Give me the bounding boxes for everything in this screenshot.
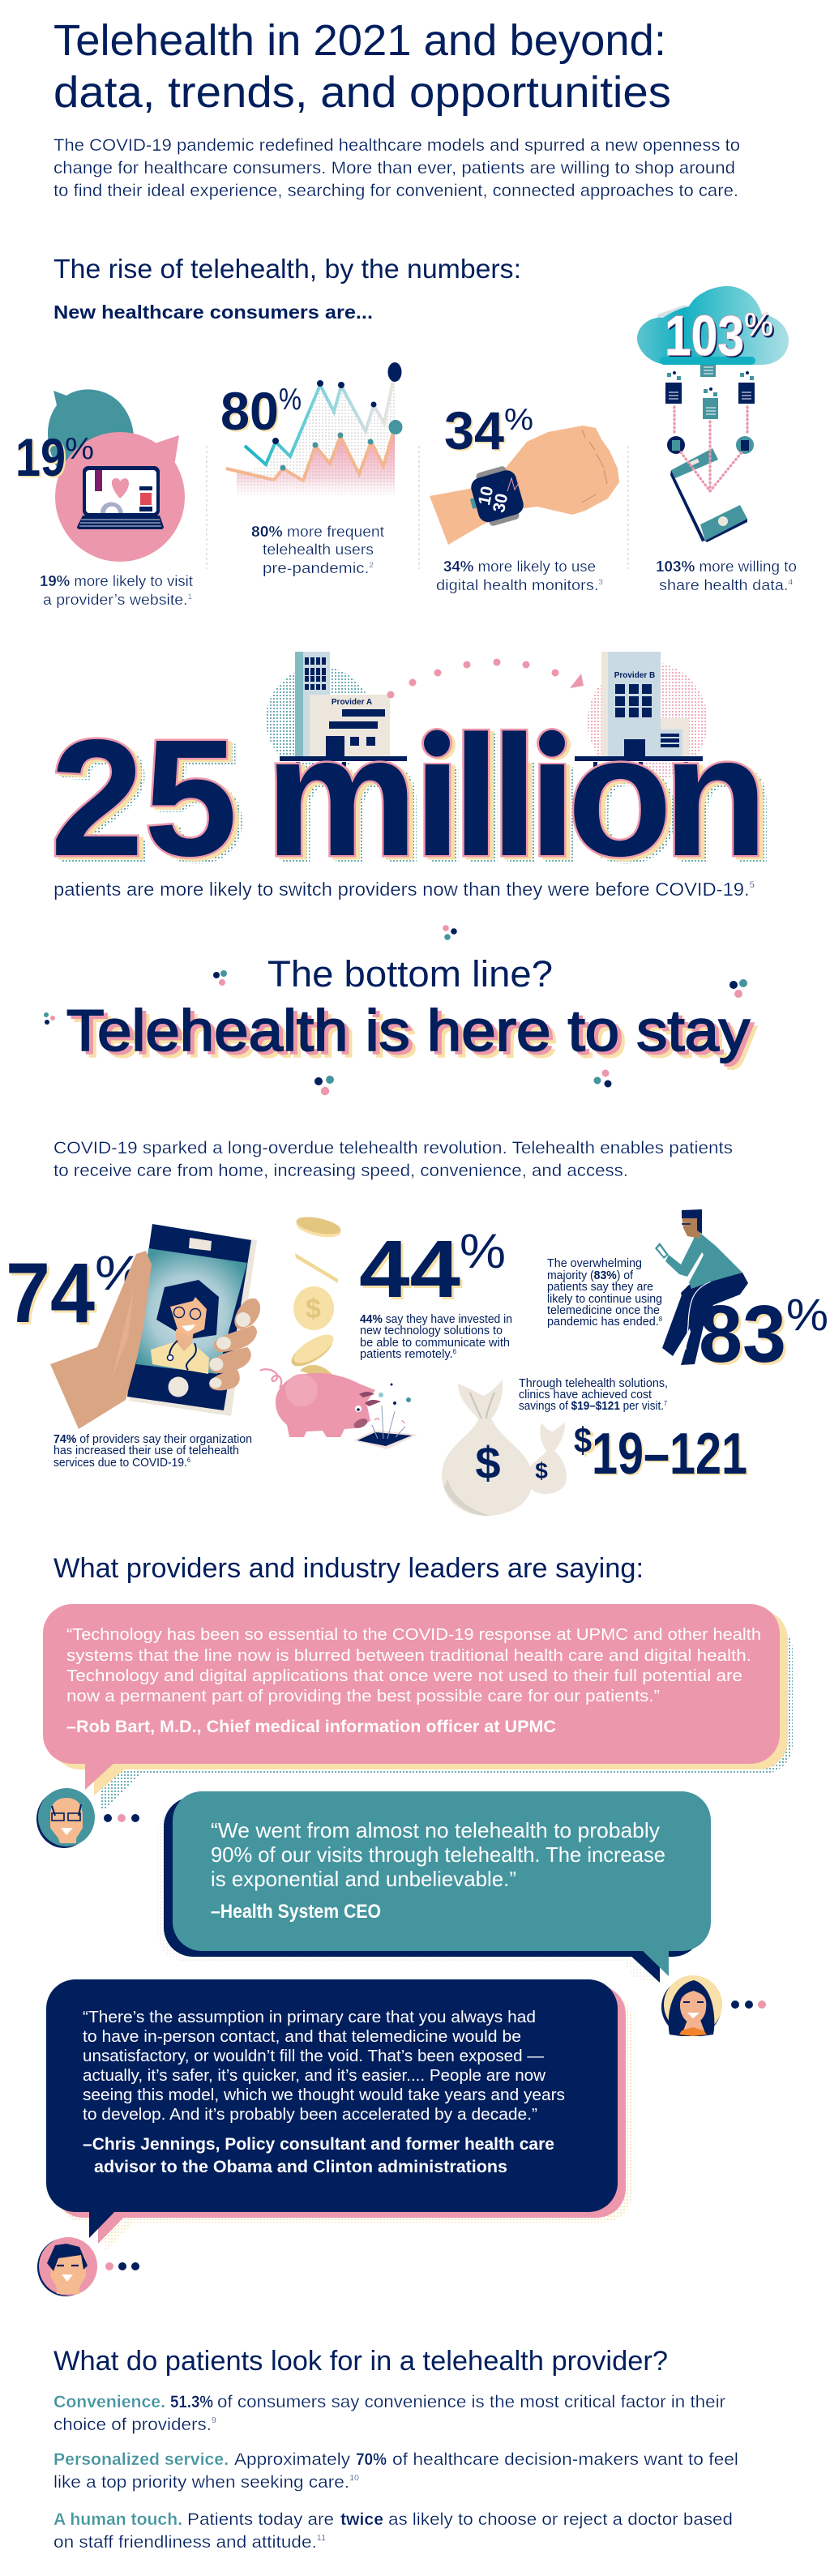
caption: 74%: services due to COVID-19.	[53, 1456, 198, 1470]
panel: navy quote bubble	[46, 1979, 632, 2252]
caption: 44%: 6	[453, 1348, 457, 1355]
caption: savings: 7	[664, 1400, 667, 1407]
panel: pink quote bubble	[43, 1604, 793, 1809]
stat: 103%: 103	[665, 304, 744, 367]
stat: 44%: 44	[359, 1224, 460, 1315]
text block: personalized service: 10	[349, 2474, 359, 2483]
text block: a human touch	[53, 2510, 733, 2552]
caption: 83%: majority (83%) of	[547, 1269, 634, 1282]
caption: 34%: 3	[598, 578, 603, 586]
quote attribution: advisor to the Obama and Clinton administrations	[94, 2158, 507, 2176]
caption: 34%: digital health monitors.	[436, 577, 582, 593]
panel: cost savings	[442, 1376, 749, 1516]
stat: 83%: 83	[699, 1289, 786, 1380]
caption: 74%: 74% of providers say their organization	[53, 1432, 252, 1446]
caption: patients switching: patients are more likely to switch providers now than they were before COVID-19.	[53, 879, 726, 900]
panel: 74 percent providers	[6, 1224, 260, 1470]
quote text: to develop. And it’s probably been accelerated by a decade.”	[83, 2105, 537, 2124]
text block: a human touch: twice	[340, 2510, 383, 2529]
panel: 19 percent website	[15, 389, 193, 608]
caption: 34%	[436, 558, 603, 593]
caption: 83%: telemedicine once the	[547, 1303, 660, 1317]
icon: cloud	[637, 286, 789, 365]
illustration: money bags	[442, 1380, 567, 1516]
illustration: piggy bank	[260, 1365, 381, 1437]
text block: convenience: Convenience.	[53, 2393, 165, 2411]
quote text	[83, 2008, 565, 2124]
stat: 44%: %	[460, 1224, 506, 1278]
text block: personalized service: 70%	[356, 2450, 387, 2469]
quote text: Technology and digital applications that once were not used to their full potential are	[66, 1667, 742, 1685]
confetti dots	[44, 925, 747, 1095]
quote text: seeing this model, which we thought would take years and years	[83, 2086, 565, 2104]
caption: savings: Through telehealth solutions,	[519, 1376, 668, 1390]
illustration: money bags: $	[475, 1437, 501, 1488]
caption: savings: savings of $19–$121 per visit.	[519, 1399, 669, 1413]
quote text: systems that the line now is blurred between traditional health care and digital health.	[66, 1647, 751, 1665]
avatar: health system CEO	[661, 1975, 722, 2036]
big number: 25 million: 25	[50, 705, 237, 891]
panel: 83 percent continue	[547, 1209, 828, 1382]
big number: 25 million: million	[272, 704, 775, 896]
stat: 80%: 80	[222, 383, 280, 443]
stat: 44%	[359, 1224, 506, 1317]
caption: 74%: 6	[187, 1457, 191, 1464]
icon: wrist with smartwatch: 30	[490, 492, 511, 514]
stat: 19%: 19	[15, 427, 66, 487]
quote attribution	[83, 2135, 554, 2176]
illustration: provider A building	[280, 652, 407, 780]
panel: 80 percent users	[220, 362, 402, 576]
stat: 34%: %	[504, 403, 533, 437]
caption: 19%: 1	[188, 593, 192, 601]
dotted connection lines	[674, 407, 747, 491]
stat: 83%: %	[786, 1289, 828, 1340]
icon: phone receiving data	[670, 448, 747, 542]
illustration: falling coins: $	[306, 1294, 321, 1324]
heading: the rise of telehealth: The rise of telehealth, by the numbers:	[53, 254, 521, 284]
title	[53, 16, 671, 117]
illustration: provider B building	[575, 652, 703, 777]
stat: 19%: %	[65, 432, 94, 466]
title: data, trends, and opportunities	[53, 68, 671, 117]
caption: 83%: The overwhelming	[547, 1256, 642, 1270]
title: Telehealth in 2021 and beyond:	[53, 16, 666, 65]
caption: savings	[519, 1376, 668, 1413]
text block: personalized service: Personalized service.	[53, 2450, 229, 2469]
caption: savings: clinics have achieved cost	[519, 1388, 652, 1401]
caption: 44%: 44% say they have invested in	[360, 1312, 512, 1326]
caption: 19%: a provider’s website.	[43, 592, 176, 608]
quote text: “There’s the assumption in primary care that you always had	[83, 2008, 536, 2026]
panel: 25 million patients	[50, 652, 775, 900]
panel: 34 percent monitors	[430, 400, 619, 593]
illustration: money bags: $	[535, 1458, 548, 1483]
caption: 83%: patients say they are	[547, 1280, 653, 1294]
caption: 80%: pre-pandemic.	[263, 560, 356, 576]
stat: $19-121: 19–121	[592, 1422, 747, 1487]
text block: convenience: of consumers say convenience is the most critical factor in their	[217, 2393, 725, 2411]
big number: 25 million: million	[265, 700, 768, 892]
caption: 74%: has increased their use of telehealth	[53, 1444, 239, 1457]
illustration: provider A building: Provider A	[332, 698, 372, 707]
stat: 80%: %	[279, 383, 302, 417]
text block: a human touch: as likely to choose or reject a doctor based	[388, 2510, 733, 2529]
text block: convenience: 51.3%	[170, 2393, 213, 2411]
caption: 74%	[53, 1432, 252, 1470]
heading: what do patients look for: What do patients look for in a telehealth provider?	[53, 2346, 668, 2377]
stat: 74%: 74	[6, 1246, 95, 1341]
line chart	[226, 362, 402, 499]
panel: 44 percent investment	[260, 1213, 512, 1449]
illustration: provider B building: Provider B	[614, 671, 655, 680]
stat: $19-121: 19–121	[593, 1423, 749, 1488]
paragraph: telehealth revolution	[53, 1139, 733, 1180]
stat: $19-121: $	[575, 1423, 595, 1462]
caption: 83%: 8	[659, 1316, 663, 1323]
typing dots 3	[105, 2262, 139, 2270]
headline: telehealth is here to stay: Telehealth is here to stay	[71, 1003, 755, 1067]
quote text: 90% of our visits through telehealth. The increase	[211, 1842, 665, 1867]
stat: 44%: 44	[362, 1226, 463, 1317]
text block: a human touch: 11	[317, 2534, 326, 2543]
big number: 25 million: 25	[58, 710, 245, 896]
stat: 103%: 103	[666, 306, 746, 369]
typing dots 2	[731, 2000, 766, 2009]
quote text	[211, 1818, 665, 1891]
text block: a human touch: on staff friendliness and attitude.	[53, 2533, 298, 2552]
stat: 83%: 83	[701, 1291, 789, 1382]
stat: 103%: %	[746, 309, 775, 344]
illustration: dots behind buildings	[266, 661, 708, 781]
icon: wrist with smartwatch	[430, 426, 619, 545]
big number: 25 million: 25	[54, 708, 242, 893]
caption: 83%	[547, 1256, 663, 1329]
caption: 19%: 19% more likely to visit	[40, 573, 193, 589]
quote text: to have in-person contact, and that telemedicine would be	[83, 2027, 521, 2046]
stat: 34%	[444, 400, 533, 462]
text block: a human touch: Patients today are	[187, 2510, 334, 2529]
illustration: tablet with sparks	[353, 1383, 417, 1449]
caption: 103%: 103% more willing to	[656, 558, 797, 575]
avatar: Rob Bart	[36, 1788, 95, 1848]
caption: 83%: pandemic has ended.	[547, 1315, 663, 1329]
stat: 80%: 80	[220, 381, 279, 441]
intro paragraph: change for healthcare consumers. More than ever, patients are willing to shop around	[53, 159, 735, 178]
caption: 44%: patients remotely.	[360, 1347, 455, 1361]
caption: 19%	[40, 573, 193, 608]
caption: 83%: likely to continue using	[547, 1292, 662, 1306]
caption: 80%	[251, 524, 384, 576]
intro paragraph	[53, 136, 740, 200]
text block: personalized service: like a top priority when seeking care.	[53, 2473, 329, 2492]
text block: convenience: 9	[212, 2416, 216, 2425]
caption: patients switching: 5	[750, 880, 755, 890]
intro paragraph: to find their ideal experience, searching for convenient, connected approaches to care.	[53, 182, 738, 200]
text block: personalized service	[53, 2450, 738, 2492]
big number: 25 million: million	[269, 702, 772, 894]
typing dots 1	[104, 1814, 139, 1822]
caption: 80%: 2	[369, 561, 374, 569]
big number: 25 million	[50, 700, 775, 896]
illustration: falling coins	[287, 1213, 342, 1372]
stat: 34%: 34	[446, 402, 506, 462]
caption: 80%: telehealth users	[263, 541, 374, 558]
quote text	[66, 1626, 761, 1705]
illustration: hand holding phone with doctor	[50, 1224, 260, 1429]
stat: 74%	[6, 1246, 143, 1343]
text block: personalized service: Approximately	[234, 2450, 351, 2469]
text block: a human touch: A human touch.	[53, 2510, 182, 2529]
quote text: “We went from almost no telehealth to probably	[211, 1818, 660, 1842]
quote text: unsatisfactory, or wouldn’t fill the void. That’s been exposed —	[83, 2047, 545, 2065]
heading: what providers are saying: What providers and industry leaders are saying:	[53, 1553, 644, 1584]
stat: 83%	[699, 1289, 828, 1382]
quote text: “Technology has been so essential to the COVID-19 response at UPMC and other health	[66, 1626, 761, 1644]
caption: 44%: be able to communicate with	[360, 1336, 510, 1350]
icon: data documents	[665, 365, 755, 454]
quote attribution: –Rob Bart, M.D., Chief medical information officer at UPMC	[66, 1718, 556, 1736]
headline: telehealth is here to stay: Telehealth is here to stay	[66, 999, 751, 1063]
caption: 44%: new technology solutions to	[360, 1324, 503, 1337]
caption: 44%	[360, 1312, 512, 1361]
icon: wrist with smartwatch: 10	[475, 485, 497, 507]
icon: speech bubbles with laptop	[48, 389, 185, 562]
headline: telehealth is here to stay: Telehealth is here to stay	[74, 1006, 758, 1070]
panel: 103 percent share data	[637, 286, 797, 593]
quote attribution: –Chris Jennings, Policy consultant and former health care	[83, 2135, 554, 2154]
avatar: Chris Jennings	[37, 2237, 97, 2296]
quote text: is exponential and unbelievable.”	[211, 1867, 516, 1891]
caption: 80%: 80% more frequent	[251, 524, 384, 540]
caption: 103%: 4	[788, 578, 793, 586]
stat: 19%: 19	[17, 429, 67, 489]
quote text: actually, it’s safer, it’s quicker, and it’s easier.... People are now	[83, 2066, 545, 2085]
quote attribution: –Health System CEO	[211, 1901, 381, 1923]
quote text: now a permanent part of providing the best possible care for our patients.”	[66, 1688, 660, 1705]
stat: $19-121: $	[574, 1421, 592, 1461]
stat: 74%: %	[95, 1246, 143, 1300]
caption: 103%	[656, 558, 797, 593]
stat: 34%: 34	[444, 400, 504, 460]
intro paragraph: The COVID-19 pandemic redefined healthcare models and spurred a new openness to	[53, 136, 740, 155]
heading: the bottom line: The bottom line?	[267, 953, 553, 995]
arrow: switching providers	[387, 658, 584, 699]
stat: 103%: %	[744, 307, 773, 343]
caption: 103%: share health data.	[659, 577, 776, 593]
caption: 34%: 34% more likely to use	[443, 558, 596, 575]
subheading: new healthcare consumers: New healthcare consumers are...	[53, 302, 373, 323]
text block: convenience: choice of providers.	[53, 2416, 201, 2434]
illustration: man with phone	[655, 1209, 748, 1365]
paragraph: telehealth revolution: to receive care from home, increasing speed, convenience, and access.	[53, 1162, 628, 1180]
panel: teal quote bubble	[157, 1791, 711, 1983]
text block: convenience	[53, 2393, 725, 2434]
paragraph: telehealth revolution: COVID-19 sparked a long-overdue telehealth revolution. Telehealth enables patients	[53, 1139, 733, 1157]
stat: 74%: 74	[8, 1248, 97, 1343]
text block: personalized service: of healthcare decision-makers want to feel	[392, 2450, 738, 2469]
